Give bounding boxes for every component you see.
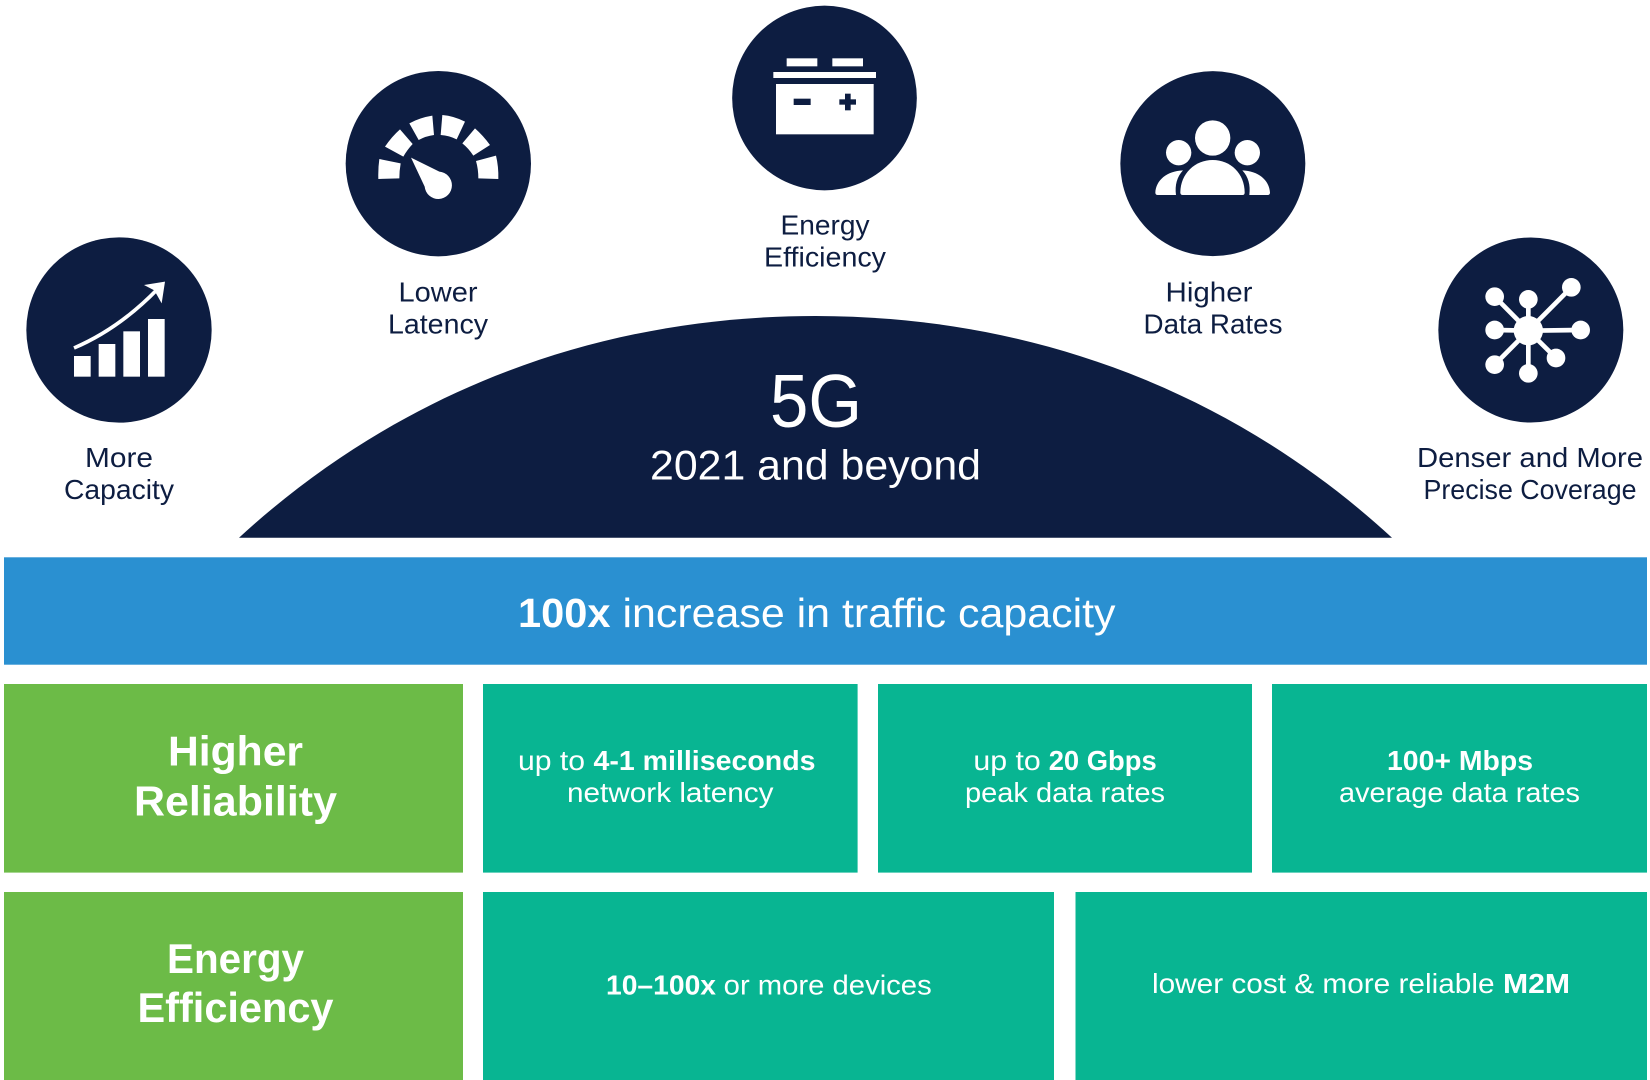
panel: lower cost and more reliable M2M [1076, 892, 1647, 1080]
panel: Higher Reliability [4, 684, 463, 873]
panel: 10-100x or more devices [483, 892, 1054, 1080]
panel: Energy Efficiency [4, 892, 463, 1080]
panel: 10-100x or more devices: or more devices [724, 970, 932, 1000]
banner: 100x increase in traffic capacity: increase in traffic capacity [622, 590, 1116, 636]
feature: More Capacity [26, 237, 212, 505]
panel: 20 Gbps peak data rates: peak data rates [965, 777, 1165, 808]
feature: Lower Latency [346, 71, 531, 340]
label: More Capacity: Capacity [64, 474, 174, 505]
panel: lower cost and more reliable M2M: lower cost & more reliable [1152, 968, 1494, 999]
label: Energy Efficiency: Energy [780, 210, 870, 240]
panel: Higher Reliability: Higher [168, 728, 303, 774]
panel: 4-1 milliseconds network latency [483, 684, 858, 873]
panel: 20 Gbps peak data rates: 20 Gbps [1049, 745, 1157, 776]
feature: Higher Data Rates [1120, 71, 1305, 340]
panel: 20 Gbps peak data rates: up to [973, 745, 1041, 776]
label: Lower Latency: Latency [388, 308, 488, 340]
icon: battery [732, 6, 917, 190]
feature: Denser and More Precise Coverage [1417, 237, 1643, 505]
panel: 4-1 milliseconds network latency: 4-1 milliseconds [594, 745, 816, 776]
icon: speedometer [346, 71, 531, 256]
panel: 100+ Mbps average data rates: average data rates [1339, 777, 1580, 808]
panel: 4-1 milliseconds network latency: up to [518, 745, 585, 776]
panel: Energy Efficiency: Efficiency [138, 984, 334, 1031]
label: Energy Efficiency: Efficiency [764, 242, 886, 272]
banner: 100x increase in traffic capacity [4, 557, 1647, 665]
panel: 100+ Mbps average data rates: 100+ Mbps [1387, 745, 1533, 776]
label: Denser and More Precise Coverage: Precise Coverage [1424, 474, 1636, 505]
panel: Energy Efficiency: Energy [167, 935, 305, 982]
icon: network hub [1438, 237, 1623, 422]
icon: group of people [1120, 71, 1305, 256]
label: Denser and More Precise Coverage: Denser and More [1417, 442, 1643, 473]
icon: rising bar chart [26, 237, 212, 423]
dome: 5G [239, 316, 1392, 538]
label: Higher Data Rates: Higher [1166, 276, 1252, 308]
panel: Higher Reliability: Reliability [134, 778, 338, 824]
panel: 10-100x or more devices: 10–100x [606, 970, 716, 1000]
heading: 5G: 5G [770, 359, 862, 443]
panel: 20 Gbps peak data rates [878, 684, 1252, 873]
panel: lower cost and more reliable M2M: M2M [1503, 968, 1570, 999]
label: Lower Latency: Lower [398, 276, 478, 308]
label: More Capacity: More [85, 442, 153, 473]
label: Higher Data Rates: Data Rates [1144, 308, 1282, 340]
feature: Energy Efficiency [732, 6, 917, 273]
banner: 100x increase in traffic capacity: 100x [518, 590, 611, 636]
panel: 4-1 milliseconds network latency: network latency [567, 777, 774, 808]
subheading: 2021 and beyond: 2021 and beyond [650, 442, 981, 488]
panel: 100+ Mbps average data rates [1272, 684, 1647, 873]
